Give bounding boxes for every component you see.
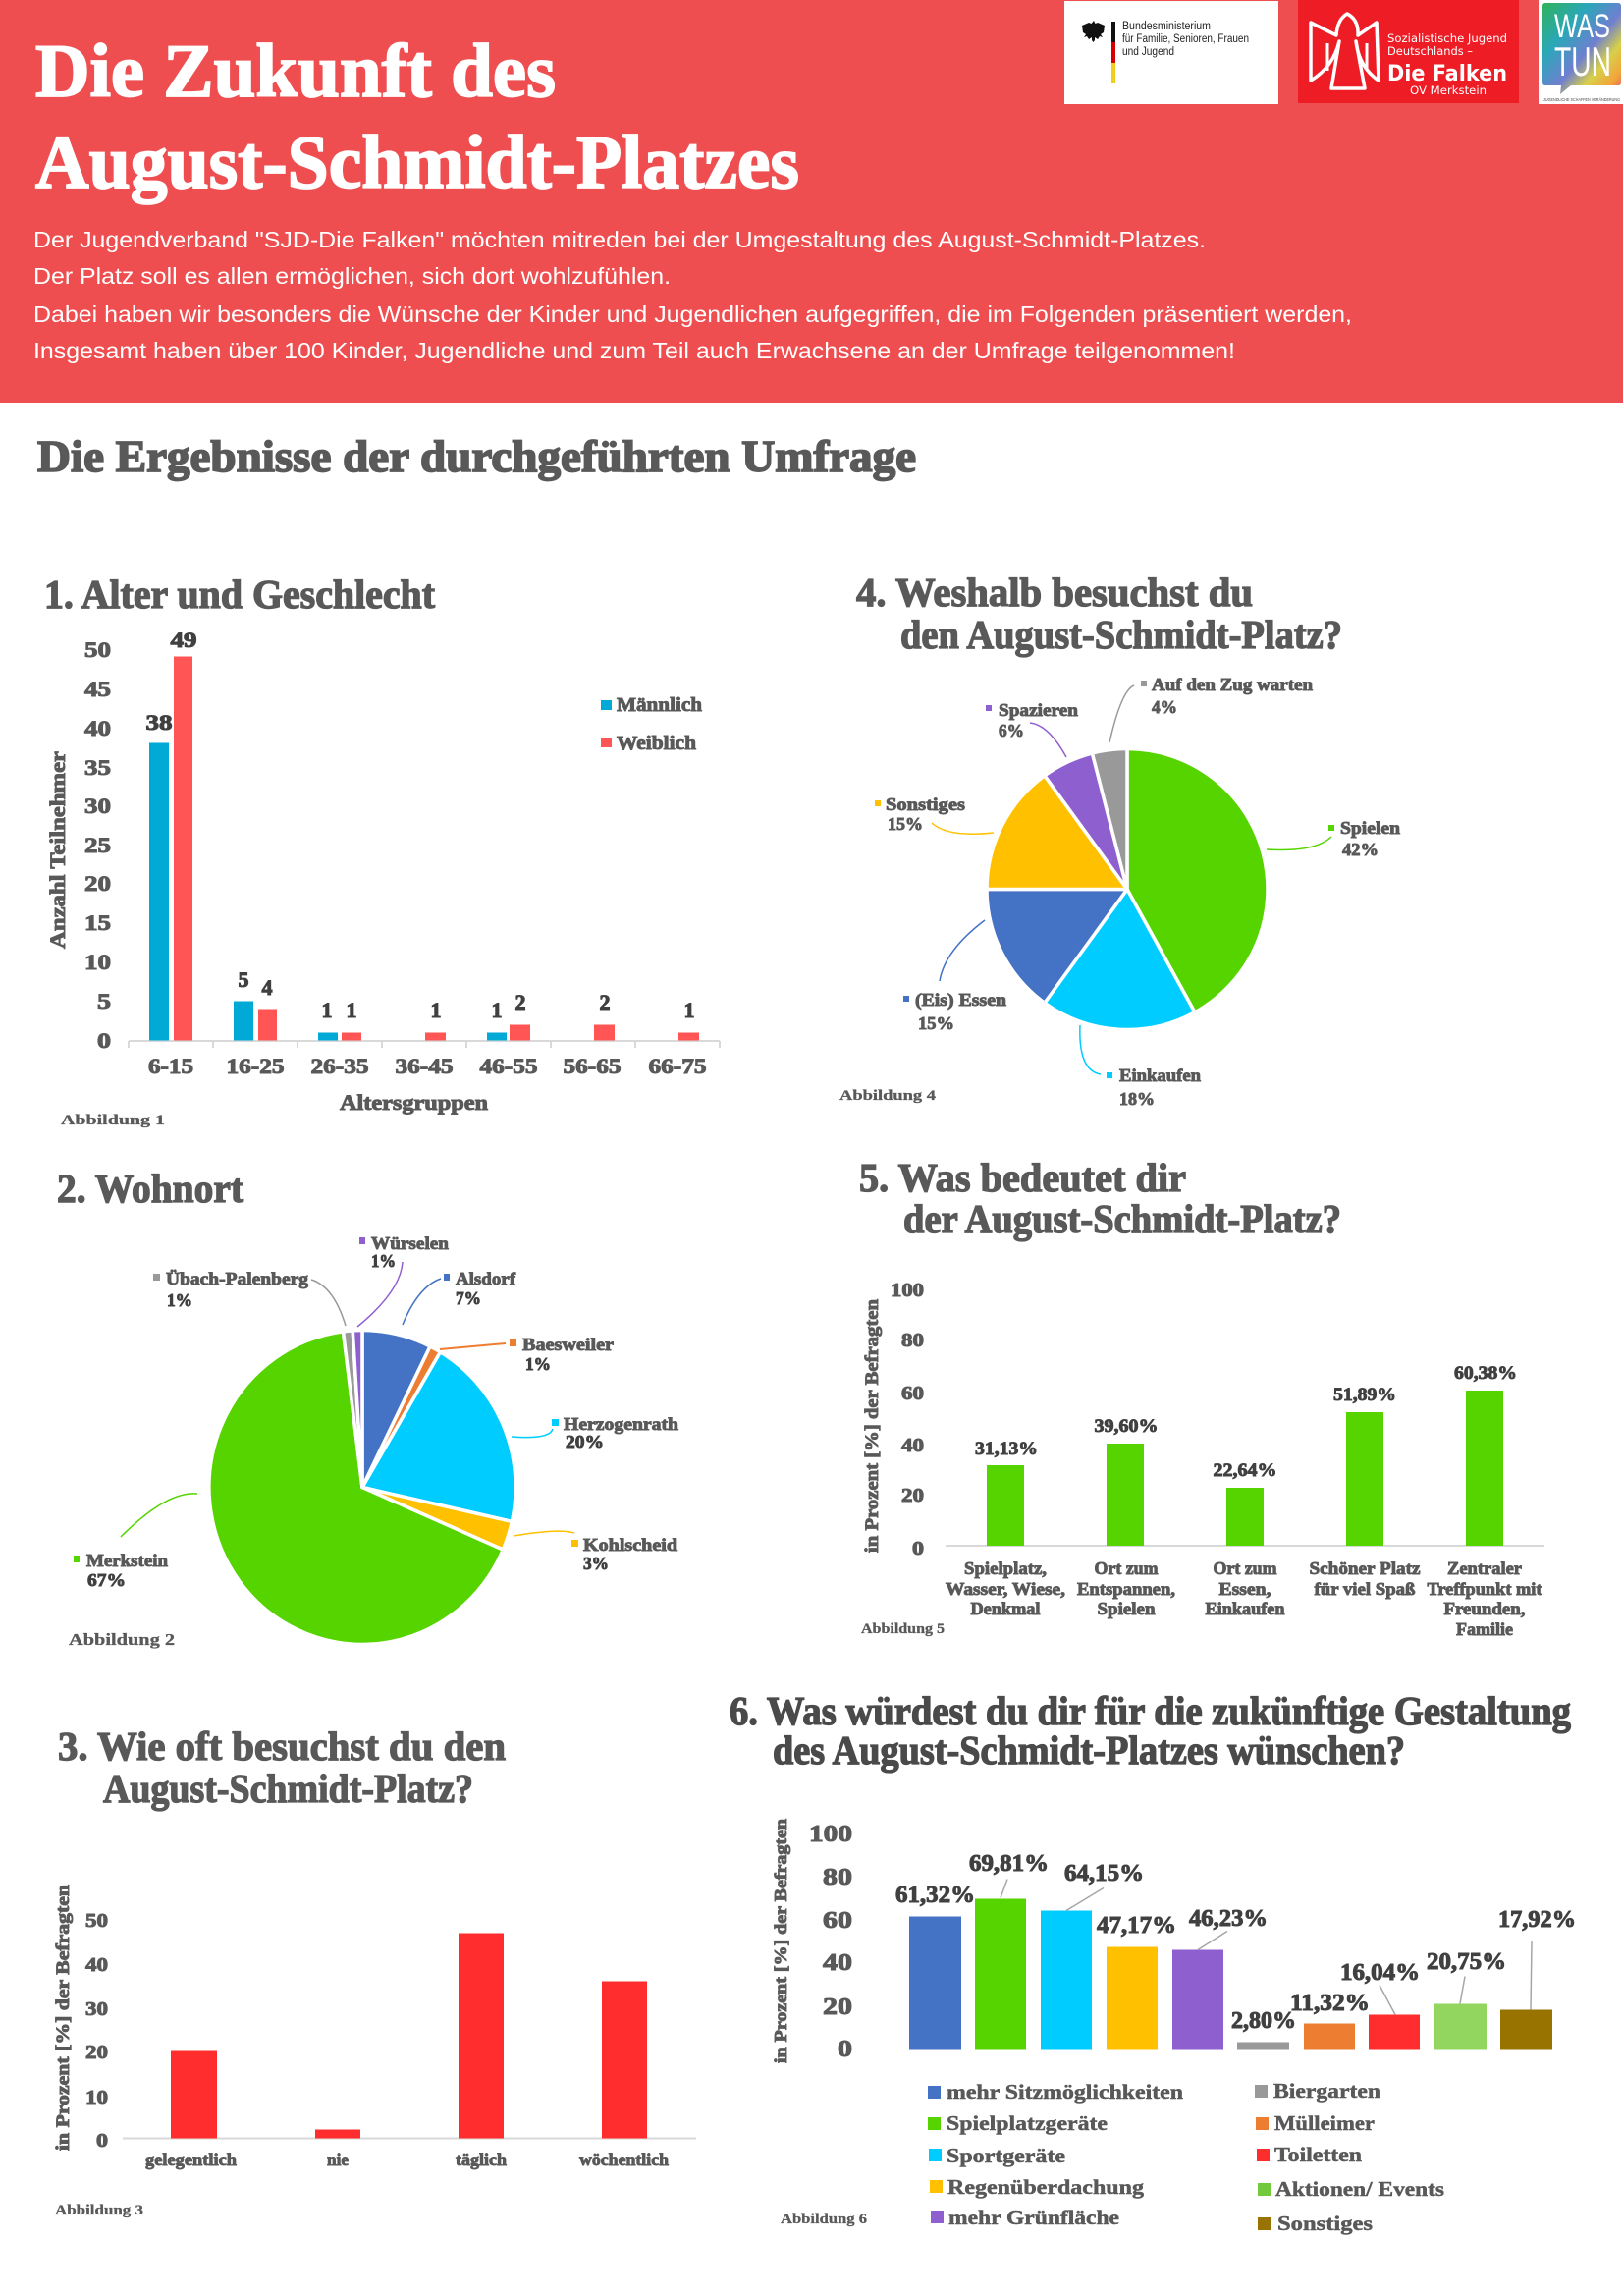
legend 6: mehr Sitzmöglichkeiten (947, 2080, 1183, 2104)
bar chart 6: 61,32% (895, 1883, 975, 1908)
heading 5 (859, 1155, 1341, 1241)
logo: Die Falken: Sozialistische Jugend (1387, 31, 1507, 45)
pie labels 4: 4% (1152, 697, 1177, 717)
legend 6: Regenüberdachung (947, 2175, 1145, 2199)
caption 2: Abbildung 2 (69, 1630, 175, 1649)
bar chart 6: 80 (823, 1865, 852, 1890)
bar chart 1: 1 (491, 998, 503, 1022)
bar chart 3: 50 (85, 1910, 108, 1932)
logo: Die Falken: Deutschlands – (1387, 44, 1473, 58)
bar chart 5: 51,89% (1333, 1385, 1396, 1405)
bar chart 5: Freunden, (1443, 1599, 1526, 1618)
caption 4: Abbildung 4 (839, 1088, 937, 1104)
header banner (0, 0, 1623, 403)
legend 6: Aktionen/ Events (1275, 2177, 1444, 2201)
caption 3: Abbildung 3 (55, 2203, 143, 2218)
panel 3: Wie oft besuchst du (53, 1723, 696, 2218)
bar chart 5: Einkaufen (1206, 1599, 1284, 1618)
intro text: Der Jugendverband "SJD-Die Falken" möchten mitreden bei der Umgestaltung des August-Schmidt-Platzes. (33, 227, 1206, 252)
bar chart 6: 100 (809, 1822, 852, 1847)
bar chart 1: 6-15 (148, 1054, 193, 1078)
heading 3: 3. Wie oft besuchst du den (58, 1723, 506, 1769)
axis title: Anzahl Teilnehmer: Anzahl Teilnehmer (45, 751, 70, 949)
caption 1: Abbildung 1 (61, 1113, 165, 1128)
section heading: Die Ergebnisse der durchgeführten Umfrage (37, 432, 916, 481)
bar chart 3: 10 (85, 2087, 108, 2108)
bar chart 5: 60 (901, 1383, 924, 1404)
axis title 6: in Prozent [%] der Befragten (771, 1819, 790, 2063)
bar chart 1: 50 (84, 637, 111, 662)
intro text: Dabei haben wir besonders die Wünsche der Kinder und Jugendlichen aufgegriffen, die im Folgenden präsentiert werden, (33, 301, 1352, 327)
bar chart 1: 15 (84, 910, 111, 935)
bar chart 1: 10 (84, 950, 111, 974)
logo: Bundesministerium: für Familie, Senioren, Frauen (1122, 33, 1249, 45)
bar chart 5: für viel Spaß (1314, 1579, 1416, 1599)
bar chart 5: Wasser, Wiese, (946, 1579, 1065, 1599)
bar chart 1: 20 (84, 871, 111, 896)
panel 2: Wohnort (57, 1166, 678, 1649)
bar chart 6: 60 (823, 1908, 852, 1934)
bar chart 1: 1 (322, 998, 332, 1022)
bar chart 6: 47,17% (1097, 1913, 1176, 1939)
bar chart 1: 46-55 (479, 1054, 538, 1078)
panel 6: Was würdest du dir wünschen (730, 1688, 1576, 2235)
bar chart 1: 40 (84, 716, 111, 740)
bar chart 1: 35 (84, 755, 111, 780)
bar chart 1: 1 (683, 998, 695, 1022)
bar chart 1: 26-35 (310, 1054, 369, 1078)
legend 6: Toiletten (1274, 2143, 1362, 2166)
bar chart 6: 0 (838, 2037, 852, 2062)
bar chart 6: 40 (823, 1950, 852, 1976)
bar chart 3: 40 (85, 1954, 108, 1976)
bar chart 6: 16,04% (1340, 1960, 1420, 1986)
logo: Was tun (1539, 0, 1623, 104)
pie chart 4 (987, 748, 1268, 1030)
panel 5: Was bedeutet dir (859, 1155, 1544, 1639)
intro text: Der Platz soll es allen ermöglichen, sich dort wohlzufühlen. (33, 263, 671, 289)
bar chart 5: 60,38% (1454, 1363, 1517, 1384)
bar chart 6: 17,92% (1498, 1907, 1576, 1933)
logo: Bundesministerium (1064, 1, 1278, 104)
bar chart 1: 2 (599, 990, 611, 1014)
bar chart 5: 20 (901, 1485, 924, 1506)
pie labels 2: 20% (566, 1432, 604, 1451)
heading 6 (730, 1688, 1571, 1773)
bar chart 5: Spielplatz, (964, 1558, 1047, 1578)
bar chart 6: 64,15% (1064, 1861, 1144, 1886)
bar chart 1: 5 (97, 989, 111, 1013)
bar chart 3: 0 (96, 2130, 108, 2152)
axis title 3: in Prozent [%] der Befragten (53, 1885, 74, 2151)
bar chart 5: 31,13% (975, 1439, 1038, 1459)
pie labels 4: Einkaufen (1119, 1066, 1201, 1085)
legend 1 (601, 694, 702, 754)
pie labels 2: Übach-Palenberg (166, 1269, 308, 1288)
main title (35, 28, 799, 204)
axis title 5: in Prozent [%] der Befragten (862, 1299, 883, 1553)
caption 5: Abbildung 5 (861, 1621, 945, 1637)
logo: Bundesministerium: Bundesministerium (1122, 21, 1211, 32)
bar chart 1: 49 (171, 628, 196, 652)
pie labels 4: 6% (999, 721, 1024, 740)
bar chart 1: 2 (514, 990, 526, 1014)
pie labels 4 (875, 675, 1400, 1109)
logo: Die Falken: OV Merkstein (1410, 83, 1487, 97)
pie labels 2: Merkstein (86, 1551, 168, 1570)
intro text (33, 227, 1352, 363)
bar chart 1: 56-65 (564, 1054, 621, 1078)
heading 5: der August-Schmidt-Platz? (903, 1196, 1341, 1241)
legend 6 (928, 2079, 1444, 2235)
bar chart 1: 0 (97, 1028, 111, 1053)
bar chart 1: 36-45 (395, 1054, 454, 1078)
bar chart 1: 5 (238, 967, 249, 992)
bar chart 1: 38 (145, 710, 173, 735)
legend 6: Spielplatzgeräte (947, 2111, 1108, 2135)
bar chart 5: 40 (901, 1435, 924, 1456)
bar chart 1: 1 (346, 998, 357, 1022)
pie labels 4: (Eis) Essen (915, 990, 1006, 1011)
legend 1: Männlich (617, 694, 702, 716)
heading 3: August-Schmidt-Platz? (103, 1766, 473, 1811)
pie labels 2 (74, 1233, 678, 1590)
bar chart 3: 20 (85, 2042, 108, 2063)
heading 3 (58, 1723, 506, 1811)
bar chart 5: Schöner Platz (1310, 1558, 1421, 1578)
pie labels 2: Alsdorf (456, 1269, 516, 1288)
bar chart 1: 30 (84, 793, 111, 818)
bar chart 3: 30 (85, 1998, 108, 2020)
pie labels 2: 3% (583, 1554, 609, 1573)
pie labels 4: 42% (1342, 840, 1379, 859)
bar chart 5: 80 (901, 1330, 924, 1351)
heading 4 (856, 570, 1342, 657)
legend 1: Weiblich (617, 733, 696, 754)
bar chart 3 (53, 1885, 696, 2169)
bar chart 5: Zentraler (1447, 1558, 1522, 1578)
panel 4: Weshalb besuchst du (839, 570, 1400, 1109)
bar chart 5: Essen, (1219, 1579, 1271, 1599)
legend 6: Mülleimer (1274, 2111, 1375, 2135)
bar chart 5: Ort zum (1214, 1558, 1276, 1578)
caption 6: Abbildung 6 (781, 2212, 868, 2227)
heading 1: 1. Alter und Geschlecht (44, 572, 435, 617)
pie labels 4: Spielen (1340, 818, 1400, 838)
logo: Die Falken: Die Falken (1387, 62, 1507, 86)
bar chart 5 (862, 1280, 1544, 1639)
pie labels 2: Baesweiler (522, 1335, 614, 1354)
heading 6: des August-Schmidt-Platzes wünschen? (773, 1727, 1405, 1773)
bar chart 5: Denkmal (970, 1599, 1041, 1618)
pie labels 2: 7% (456, 1288, 481, 1308)
pie labels 4: 15% (918, 1013, 954, 1033)
pie labels 2: Herzogenrath (564, 1414, 678, 1434)
bar chart 1: 16-25 (226, 1054, 285, 1078)
panel 1: Alter und Geschlecht (44, 572, 720, 1128)
bar chart 6: 2,80% (1231, 2008, 1296, 2034)
bar chart 5: 22,64% (1214, 1460, 1276, 1481)
bar chart 6: 11,32% (1290, 1991, 1370, 2016)
bar chart 3: nie (327, 2150, 349, 2169)
main title: Die Zukunft des (35, 28, 556, 113)
heading 2: 2. Wohnort (57, 1166, 243, 1211)
pie labels 2: Würselen (371, 1233, 449, 1253)
pie labels 2: 67% (87, 1570, 126, 1590)
bar chart 5: 39,60% (1094, 1416, 1159, 1437)
pie labels 4: Auf den Zug warten (1152, 675, 1313, 694)
bar chart 1: 25 (84, 833, 111, 857)
heading 5: 5. Was bedeutet dir (859, 1155, 1186, 1200)
bar chart 5: Spielen (1098, 1599, 1155, 1618)
bar chart 5: 100 (891, 1280, 924, 1301)
heading 4: 4. Weshalb besuchst du (856, 570, 1253, 615)
bar chart 6 (771, 1819, 1576, 2063)
legend 6: Biergarten (1273, 2079, 1380, 2103)
bar chart 5: Familie (1456, 1619, 1513, 1639)
pie labels 2: Kohlscheid (583, 1535, 677, 1555)
legend 6: Sonstiges (1277, 2212, 1373, 2235)
pie labels 2: 1% (167, 1290, 192, 1310)
pie labels 4: 18% (1119, 1089, 1155, 1109)
main title: August-Schmidt-Platzes (35, 120, 799, 204)
bar chart 5: 0 (912, 1538, 924, 1559)
logo: Die Falken (1298, 0, 1519, 103)
intro text: Insgesamt haben über 100 Kinder, Jugendliche und zum Teil auch Erwachsene an der Umfrage teilgenommen! (33, 338, 1235, 363)
bar chart 3: wöchentlich (579, 2150, 669, 2169)
bar chart 1: 4 (261, 975, 273, 1000)
bar chart 6: 46,23% (1189, 1906, 1268, 1932)
bar chart 1 (45, 628, 720, 1115)
bar chart 6: 20 (823, 1995, 852, 2020)
bar chart 1: 45 (84, 677, 111, 701)
bar chart 5: Treffpunkt mit (1428, 1579, 1542, 1599)
axis title: Altersgruppen: Altersgruppen (340, 1090, 488, 1115)
legend 6: mehr Grünfläche (948, 2206, 1119, 2229)
heading 6: 6. Was würdest du dir für die zukünftige Gestaltung (730, 1688, 1571, 1733)
pie labels 4: Spazieren (999, 700, 1078, 720)
bar chart 1: 66-75 (648, 1054, 707, 1078)
heading 4: den August-Schmidt-Platz? (900, 612, 1342, 657)
bar chart 6: 20,75% (1427, 1949, 1506, 1975)
bar chart 3: täglich (456, 2150, 507, 2169)
bar chart 6: 69,81% (969, 1851, 1049, 1877)
pie chart 2 (209, 1331, 515, 1645)
pie labels 4: Sonstiges (886, 794, 965, 814)
pie labels 2: 1% (371, 1251, 396, 1271)
bar chart 1: 1 (430, 998, 442, 1022)
bar chart 5: Ort zum (1094, 1558, 1159, 1578)
legend 6: Sportgeräte (947, 2144, 1065, 2167)
bar chart 3: gelegentlich (145, 2150, 237, 2169)
pie labels 2: 1% (525, 1354, 551, 1374)
logo: Bundesministerium: und Jugend (1122, 46, 1174, 58)
pie labels 4: 15% (888, 814, 923, 834)
bar chart 5: Entspannen, (1077, 1579, 1175, 1599)
